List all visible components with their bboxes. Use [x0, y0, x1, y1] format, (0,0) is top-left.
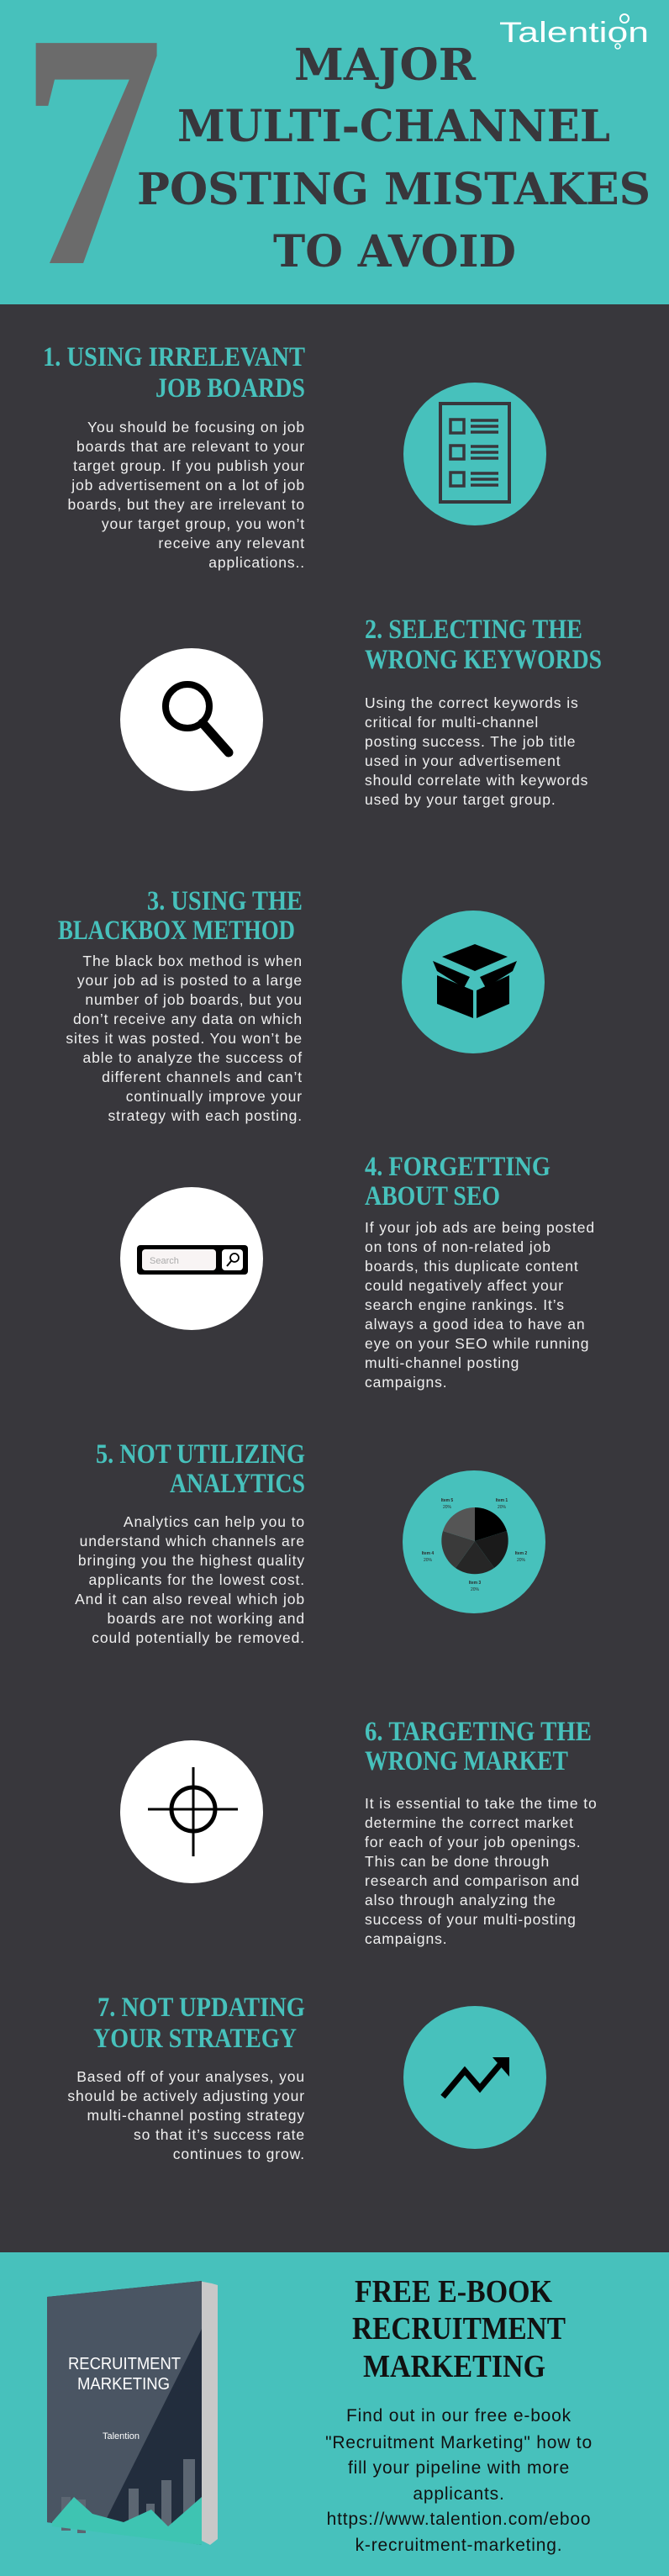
body 6: also through analyzing the: [365, 1892, 556, 1908]
body 5: could potentially be removed.: [92, 1629, 305, 1646]
section 7: updating strategy: [67, 1993, 546, 2162]
e-book body text: "Recruitment Marketing" how to: [325, 2433, 593, 2452]
body 4: could negatively affect your: [365, 1277, 564, 1294]
body 6: for each of your job openings.: [365, 1834, 582, 1850]
header panel: [0, 0, 669, 336]
body 1: applications..: [208, 554, 305, 571]
e-book body text: Find out in our free e-book: [346, 2406, 572, 2426]
body 5: boards are not working and: [108, 1610, 305, 1627]
icon: magnifier: [120, 648, 263, 791]
body 2: should correlate with keywords: [365, 772, 588, 789]
heading 6: WRONG MARKET: [365, 1746, 568, 1776]
body 7: [67, 2068, 305, 2162]
body 5: And it can also reveal which job: [75, 1591, 305, 1607]
heading 1: JOB BOARDS: [155, 373, 305, 404]
body 4: campaigns.: [365, 1374, 447, 1391]
body 7: so that it’s success rate: [134, 2126, 305, 2143]
body 4: multi-channel posting: [365, 1354, 519, 1371]
body 3: number of job boards, but you: [85, 991, 303, 1008]
e-book cover: Talention: [103, 2431, 140, 2441]
heading 2: WRONG KEYWORDS: [365, 645, 602, 675]
body 6: success of your multi-posting: [365, 1911, 577, 1928]
body 3: The black box method is when: [82, 953, 303, 969]
e-book body text: applicants.: [413, 2484, 505, 2504]
title: TO AVOID: [273, 226, 516, 277]
e-book cover: [47, 2281, 218, 2545]
icon: list document: [403, 383, 546, 525]
body 1: job advertisement on a lot of job: [71, 477, 305, 494]
body 1: boards that are relevant to your: [76, 438, 305, 455]
chart: pie chart: 20%: [443, 1505, 452, 1510]
heading 4: 4. FORGETTING: [365, 1152, 550, 1182]
chart: pie chart: [403, 1470, 545, 1613]
body 3: different channels and can’t: [102, 1069, 303, 1085]
section 2: wrong keywords: [120, 615, 602, 808]
body 5: understand which channels are: [80, 1533, 305, 1549]
e-book heading: MARKETING: [363, 2349, 545, 2384]
icon: search bar: Search: [150, 1256, 179, 1266]
body 4: [365, 1219, 595, 1391]
section 1: irrelevant job boards: [43, 342, 546, 571]
title: POSTING MISTAKES: [137, 164, 651, 215]
body 6: This can be done through: [365, 1853, 550, 1870]
chart: pie chart: 20%: [498, 1505, 507, 1510]
body 1: boards, but they are irrelevant to: [67, 496, 305, 513]
chart: pie chart: Item 2: [515, 1551, 527, 1556]
heading 3: 3. USING THE: [147, 886, 303, 916]
heading 5: [96, 1439, 305, 1499]
e-book heading: RECRUITMENT: [352, 2311, 566, 2346]
body 6: [365, 1795, 598, 1947]
heading 6: [365, 1717, 592, 1776]
body 1: [67, 419, 305, 571]
heading 7: 7. NOT UPDATING: [97, 1993, 305, 2023]
body 4: boards, this duplicate content: [365, 1258, 579, 1275]
body 2: critical for multi-channel: [365, 714, 539, 731]
chart: pie chart: 20%: [471, 1587, 480, 1592]
heading 5: ANALYTICS: [170, 1469, 305, 1499]
body 3: don’t receive any data on which: [73, 1011, 303, 1027]
body 3: strategy with each posting.: [108, 1107, 303, 1124]
body 2: posting success. The job title: [365, 733, 576, 750]
chart: pie chart: Item 5: [441, 1498, 453, 1503]
e-book cover: MARKETING: [77, 2375, 170, 2394]
body 3: sites it was posted. You won’t be: [66, 1030, 303, 1047]
body 2: Using the correct keywords is: [365, 694, 579, 711]
body 1: your target group, you won’t: [102, 515, 305, 532]
body 6: It is essential to take the time to: [365, 1795, 598, 1812]
body 3: [66, 953, 303, 1124]
body 1: You should be focusing on job: [87, 419, 305, 435]
body 4: search engine rankings. It’s: [365, 1296, 565, 1313]
e-book body text: fill your pipeline with more: [348, 2458, 570, 2478]
e-book heading: FREE E-BOOK: [355, 2274, 552, 2309]
body 5: bringing you the highest quality: [78, 1552, 305, 1569]
body 7: continues to grow.: [173, 2146, 305, 2162]
heading 6: 6. TARGETING THE: [365, 1717, 592, 1747]
heading 4: ABOUT SEO: [365, 1181, 500, 1211]
section 5: analytics: [75, 1439, 545, 1646]
icon: crosshair: [120, 1740, 263, 1883]
body 6: determine the correct market: [365, 1814, 574, 1831]
title: [137, 40, 651, 277]
body 3: continually improve your: [126, 1088, 303, 1105]
heading 1: [43, 342, 305, 404]
body 6: research and comparison and: [365, 1872, 580, 1889]
body 2: used by your target group.: [365, 791, 556, 808]
body 5: applicants for the lowest cost.: [89, 1571, 305, 1588]
chart: pie chart: Item 4: [422, 1551, 434, 1556]
title: MULTI-CHANNEL: [177, 101, 610, 152]
e-book heading: [352, 2274, 566, 2384]
heading 2: 2. SELECTING THE: [365, 615, 582, 645]
chart: pie chart: 20%: [424, 1558, 433, 1563]
logo: Talention: Talention: [499, 17, 649, 49]
body 4: eye on your SEO while running: [365, 1335, 589, 1352]
heading 1: 1. USING IRRELEVANT: [43, 342, 305, 372]
section 3: blackbox method: [58, 886, 545, 1124]
icon: search bar: [120, 1187, 263, 1330]
chart: pie chart: Item 1: [496, 1498, 508, 1503]
body 2: [365, 694, 588, 808]
heading 4: [365, 1152, 550, 1211]
title: MAJOR: [294, 40, 477, 91]
e-book body text: k-recruitment-marketing.: [356, 2536, 562, 2555]
body 4: always a good idea to have an: [365, 1316, 586, 1333]
heading 3: [58, 886, 303, 946]
body 3: able to analyze the success of: [83, 1049, 303, 1066]
body 4: on tons of non-related job: [365, 1238, 551, 1255]
heading 3: BLACKBOX METHOD: [58, 916, 295, 946]
section 4: SEO: [120, 1152, 595, 1391]
body 2: used in your advertisement: [365, 752, 561, 769]
section 6: wrong market: [120, 1717, 598, 1947]
body 7: should be actively adjusting your: [67, 2088, 305, 2104]
body 4: If your job ads are being posted: [365, 1219, 595, 1236]
e-book body text: https://www.talention.com/eboo: [327, 2510, 591, 2529]
icon: open box: [402, 911, 545, 1053]
footer panel: free e-book: [0, 2252, 669, 2576]
body 7: multi-channel posting strategy: [87, 2107, 305, 2124]
body 1: target group. If you publish your: [73, 457, 305, 474]
body 6: campaigns.: [365, 1930, 447, 1947]
heading 7: YOUR STRATEGY: [93, 2024, 297, 2054]
e-book body text: [325, 2406, 593, 2555]
heading 2: [365, 615, 602, 675]
body 5: Analytics can help you to: [124, 1513, 305, 1530]
body 3: your job ad is posted to a large: [77, 972, 303, 989]
body 7: Based off of your analyses, you: [76, 2068, 305, 2085]
e-book cover: RECRUITMENT: [68, 2355, 181, 2373]
chart: pie chart: Item 3: [469, 1581, 481, 1586]
body 1: receive any relevant: [158, 535, 305, 552]
chart: pie chart: 20%: [517, 1558, 526, 1563]
body 5: [75, 1513, 305, 1646]
heading 5: 5. NOT UTILIZING: [96, 1439, 305, 1470]
heading 7: [93, 1993, 305, 2054]
icon: trend arrow: [403, 2006, 546, 2149]
